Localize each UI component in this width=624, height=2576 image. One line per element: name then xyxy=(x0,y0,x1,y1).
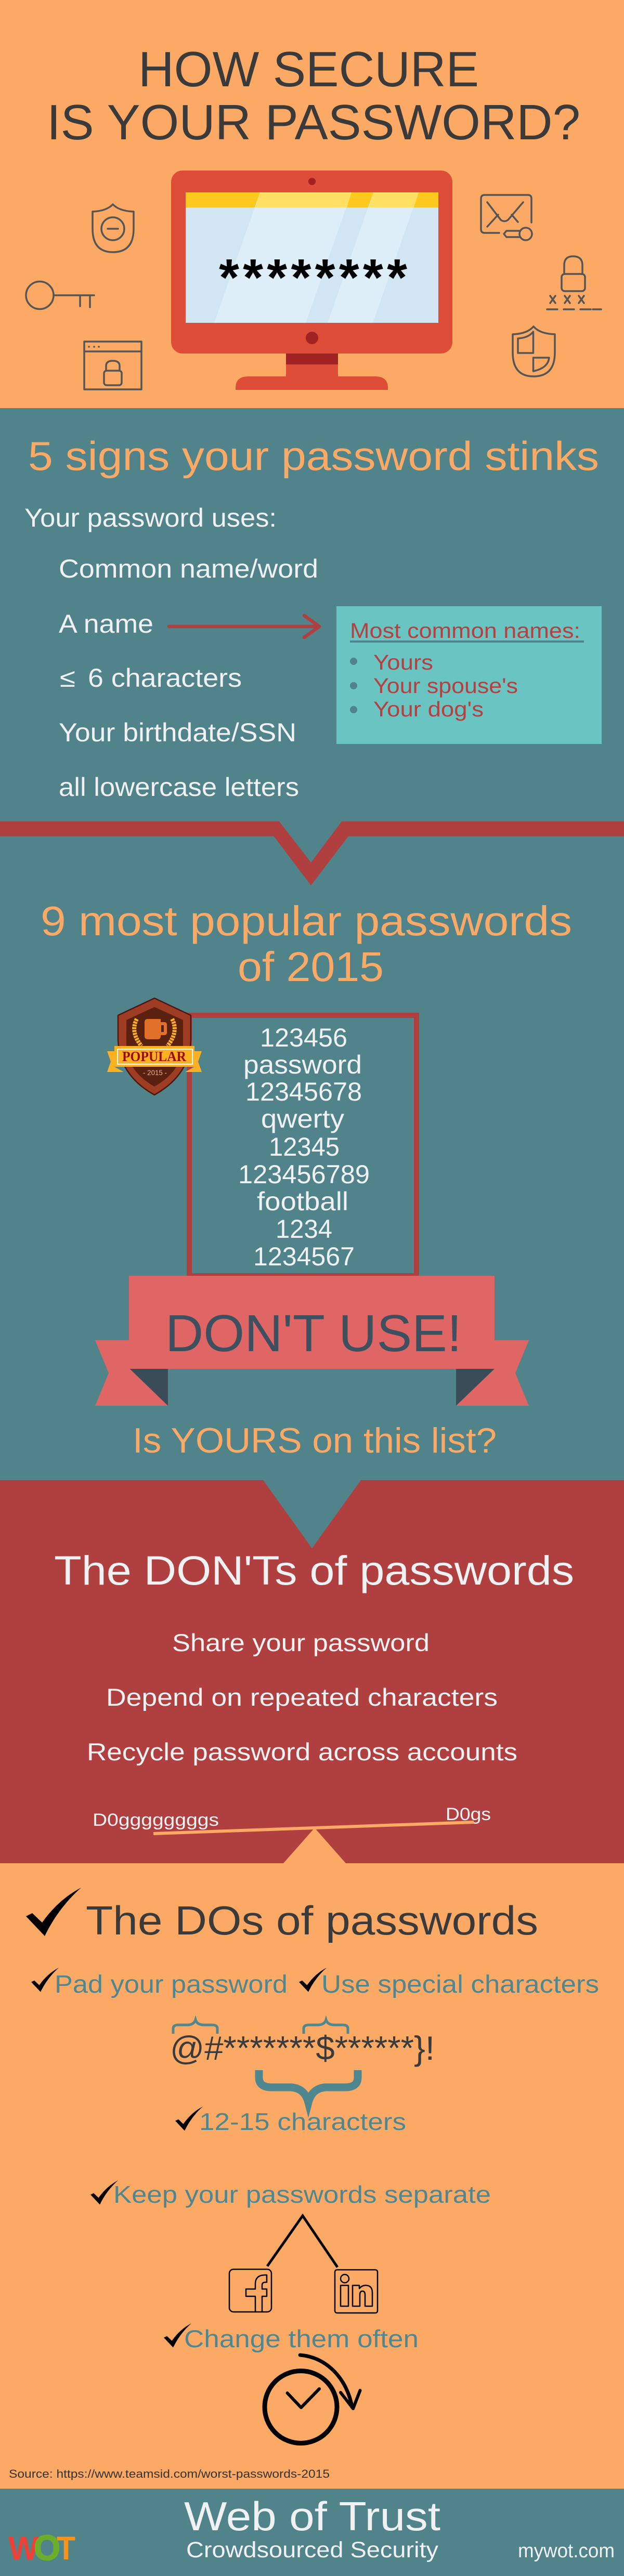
password list box: 12345 xyxy=(269,1132,340,1161)
password list box: 1234 xyxy=(276,1214,332,1244)
logo: wot: T xyxy=(57,2530,75,2567)
list of don'ts: Depend on repeated characters xyxy=(106,1683,498,1711)
list of signs: all lowercase letters xyxy=(59,773,299,802)
badge: popular 2015: - 2015 - xyxy=(143,1068,167,1077)
tagline: Crowdsourced Security xyxy=(186,2538,439,2562)
source note: Source: https://www.teamsid.com/worst-passwords-2015 xyxy=(9,2467,330,2480)
icon: lock with masked password xyxy=(547,256,601,309)
do: 12-15 characters: 12-15 characters xyxy=(199,2108,406,2135)
heading: 9 most popular passwords: of 2015 xyxy=(238,944,384,990)
password list box xyxy=(189,1015,417,1276)
brand name: Web of Trust xyxy=(184,2493,440,2539)
panel: hero xyxy=(0,0,624,408)
padded password diagram: @#*******$******}! xyxy=(170,2029,435,2067)
badge: popular 2015 xyxy=(107,998,202,1095)
icon: facebook xyxy=(229,2269,271,2312)
padded password diagram xyxy=(170,2020,435,2102)
icon: shield with minus xyxy=(93,204,134,252)
callout: most common names: Your spouse's xyxy=(373,674,518,698)
arrow xyxy=(169,616,319,637)
title: HOW SECURE xyxy=(138,42,479,97)
list of don'ts xyxy=(87,1629,517,1766)
heading: the dos: The DOs of passwords xyxy=(86,1898,538,1943)
list of signs: A name xyxy=(59,609,153,638)
badge: popular 2015: POPULAR xyxy=(122,1049,186,1064)
list of don'ts: Recycle password across accounts xyxy=(87,1738,517,1766)
seesaw chart: D0gs xyxy=(446,1804,491,1824)
do: use special characters: Use special characters xyxy=(321,1971,599,1998)
list of don'ts: Share your password xyxy=(172,1629,430,1656)
heading: 5 signs: 5 signs your password stinks xyxy=(28,433,599,479)
callout: most common names xyxy=(336,606,602,744)
teal pointer xyxy=(263,1480,361,1548)
panel: dos xyxy=(0,1863,624,2489)
red divider with chevron xyxy=(0,821,624,885)
callout text: is yours on this list: Is YOURS on this list? xyxy=(133,1421,497,1460)
password asterisks: ******** xyxy=(219,249,407,307)
icon: browser with lock xyxy=(84,342,141,389)
seesaw chart xyxy=(93,1804,491,1863)
website: mywot.com xyxy=(518,2540,615,2562)
icon: clock with arrow xyxy=(265,2355,360,2443)
do: keep passwords separate: Keep your passwords separate xyxy=(113,2181,491,2208)
do: pad your password: Pad your password xyxy=(55,1971,288,1998)
list of signs: 6 characters xyxy=(88,663,242,692)
seesaw chart: D0ggggggggs xyxy=(93,1810,219,1830)
icon: linkedin xyxy=(335,2270,378,2313)
list of signs xyxy=(24,503,318,802)
logo: wot: W xyxy=(8,2530,39,2567)
list of signs: ≤ xyxy=(60,663,75,692)
heading: the don'ts: The DON'Ts of passwords xyxy=(54,1547,574,1593)
panel: 5 signs xyxy=(0,408,624,1480)
password list box: password xyxy=(243,1050,362,1079)
branching lines xyxy=(267,2216,337,2267)
heading: 9 most popular passwords xyxy=(41,898,572,990)
banner: don't use: DON'T USE! xyxy=(165,1304,462,1363)
monitor illustration xyxy=(171,171,452,390)
title xyxy=(47,42,580,150)
password list box: 123456 xyxy=(260,1023,347,1052)
banner: don't use xyxy=(95,1276,529,1406)
heading: 9 most popular passwords: 9 most popular passwords xyxy=(41,898,572,944)
icon: big check xyxy=(26,1888,81,1936)
callout: most common names: Most common names: xyxy=(350,619,580,643)
icon: key xyxy=(26,282,94,309)
password list box: 1234567 xyxy=(253,1242,355,1271)
logo: wot: O xyxy=(34,2528,60,2568)
callout: most common names: Yours xyxy=(373,650,433,674)
panel: don'ts xyxy=(0,1480,624,1863)
do: change them often: Change them often xyxy=(184,2325,419,2352)
panel: footer xyxy=(0,2489,624,2576)
icon: envelope with key xyxy=(481,195,532,240)
title: IS YOUR PASSWORD? xyxy=(47,95,580,150)
logo: wot xyxy=(8,2528,75,2568)
callout: most common names: Your dog's xyxy=(373,697,484,721)
password list box: football xyxy=(257,1187,348,1216)
list of signs: Your birthdate/SSN xyxy=(59,718,296,747)
password list box: qwerty xyxy=(261,1104,344,1133)
list of signs: Your password uses: xyxy=(24,503,277,532)
icon: quartered shield xyxy=(513,326,555,376)
list of signs: Common name/word xyxy=(59,554,318,583)
password list box: 123456789 xyxy=(238,1160,370,1189)
password list box: 12345678 xyxy=(245,1077,362,1106)
